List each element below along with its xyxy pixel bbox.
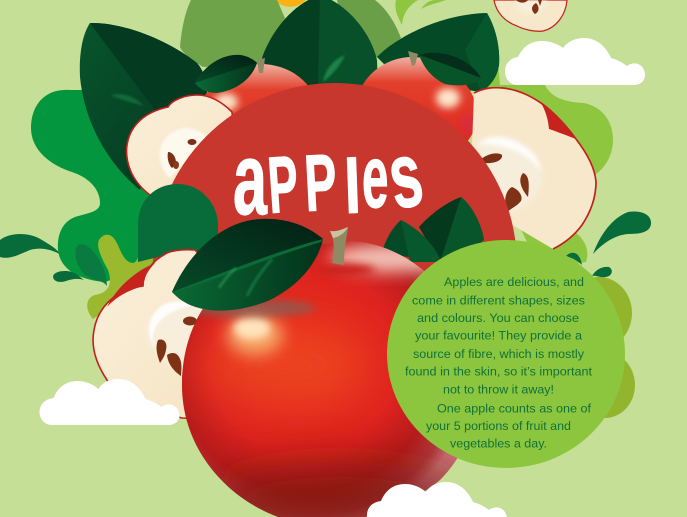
text block: Apples are delicious, and <box>444 275 584 289</box>
light green splashes at top <box>395 0 446 25</box>
red circle <box>153 83 517 447</box>
leaf: middle right rear <box>419 197 484 262</box>
half apple: top right corner <box>494 0 567 31</box>
half apple: top left <box>127 95 240 200</box>
leaf: small green over left blob <box>75 244 107 286</box>
text block: come in different shapes, sizes <box>412 293 585 307</box>
title: s <box>381 123 430 229</box>
text block: found in the skin, so it’s important <box>405 364 593 378</box>
dark leaf: top centre <box>262 0 378 88</box>
cloud: bottom <box>367 482 507 517</box>
dark leaf: top left <box>80 23 207 190</box>
blob: olive left <box>87 235 153 319</box>
leaf: big apple <box>172 219 323 311</box>
half apple: top right <box>470 88 596 249</box>
leaf: middle left rear <box>382 220 441 262</box>
text block: your favourite! They provide a <box>415 329 582 343</box>
cloud: left <box>40 379 180 425</box>
title: l <box>343 144 362 230</box>
dark leaf: top right <box>377 13 499 92</box>
text block: source of fibre, which is mostly <box>413 347 585 361</box>
blob: bright green right <box>470 63 613 270</box>
title: e <box>362 127 388 226</box>
blob: dark green <box>138 184 218 270</box>
small apple: top left <box>205 64 310 150</box>
text block: and colours. You can choose <box>417 311 579 325</box>
blob: green left <box>31 90 200 282</box>
big apple <box>182 241 478 517</box>
title <box>233 122 430 236</box>
orange shape at top <box>275 0 306 7</box>
splash: right small <box>592 267 612 277</box>
text block: One apple counts as one of <box>437 402 592 416</box>
stem: left small apple <box>257 58 265 73</box>
title: P <box>302 137 339 228</box>
cloud: top right <box>505 38 645 85</box>
back leaf: olive left <box>180 0 285 67</box>
splash: right large <box>593 212 651 254</box>
stem: right small apple <box>408 51 418 66</box>
text block: vegetables a day. <box>450 437 547 451</box>
small leaf: left apple <box>195 55 257 93</box>
blob: olive right <box>566 277 635 418</box>
small leaf: right apple <box>419 53 481 85</box>
stem: big apple <box>330 227 348 265</box>
small apple: top right <box>362 57 477 142</box>
text block: your 5 portions of fruit and <box>426 419 571 433</box>
half apple: bottom left <box>93 250 240 420</box>
text block <box>405 275 593 451</box>
text block: not to throw it away! <box>443 382 554 396</box>
title: P <box>265 138 301 230</box>
text circle <box>387 240 625 468</box>
title: a <box>233 122 268 236</box>
splash: left large <box>0 234 60 258</box>
back leaf: olive right <box>337 0 401 58</box>
splash: right tiny <box>566 253 582 265</box>
splash: left small <box>53 271 84 282</box>
